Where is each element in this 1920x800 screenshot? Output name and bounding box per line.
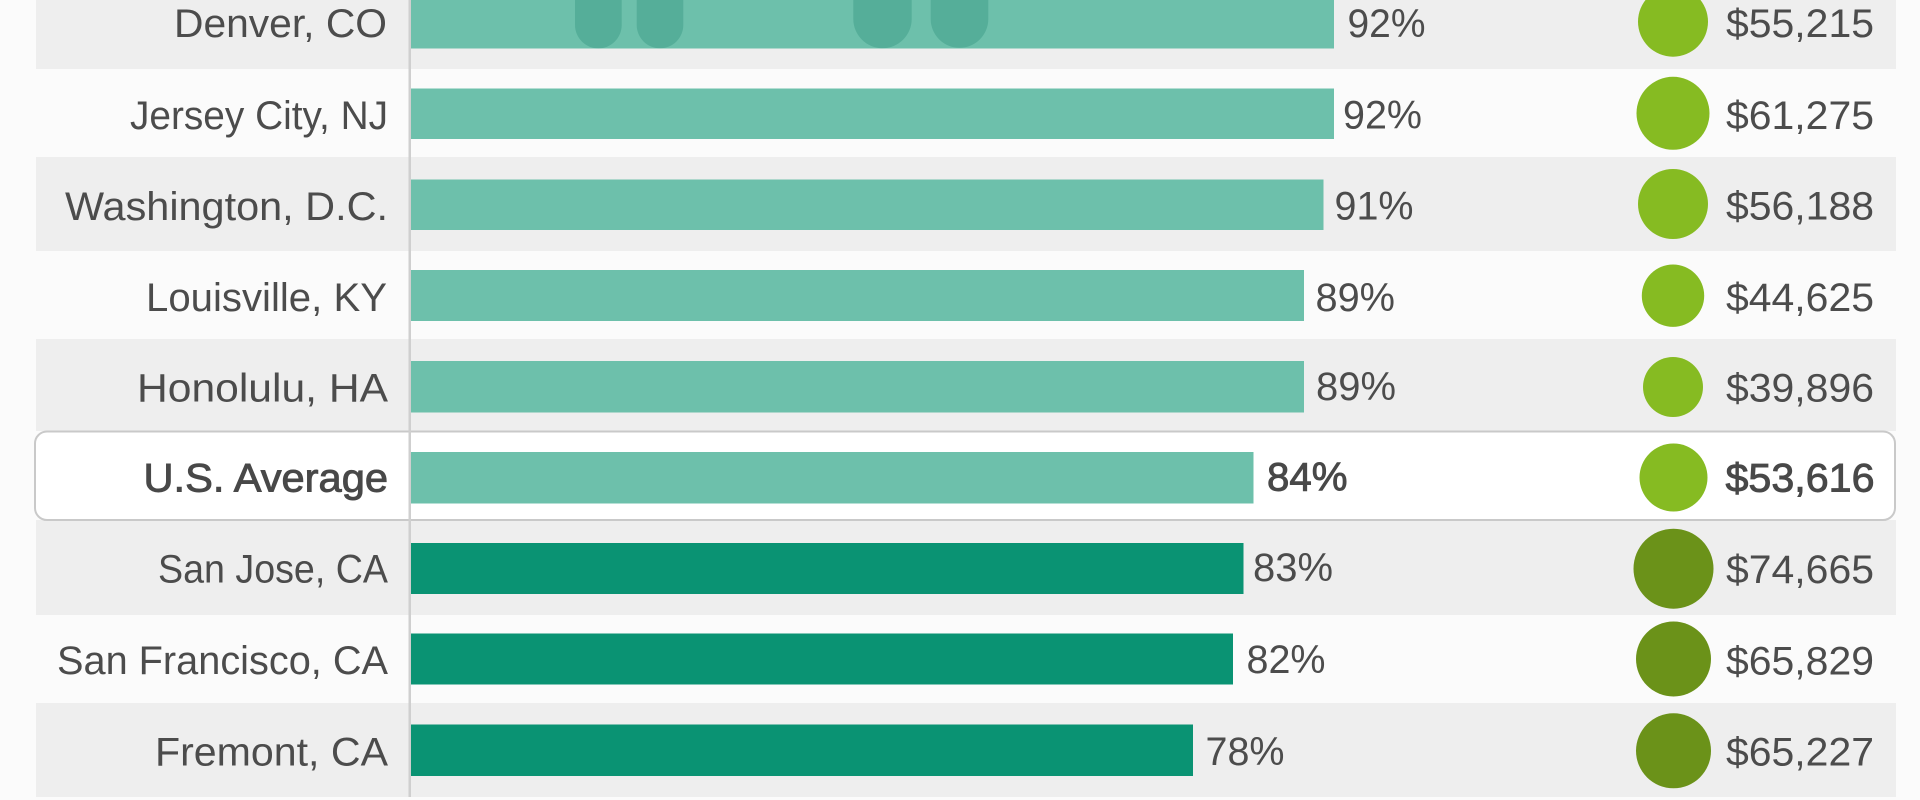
row: San Francisco, CA: 82% bbox=[1246, 638, 1326, 682]
row: Jersey City, NJ: 92% bbox=[1343, 94, 1422, 138]
row: San Jose, CA: $74,665 bbox=[1726, 548, 1874, 592]
row: Fremont, CA: Fremont, CA bbox=[155, 730, 388, 774]
highlight card: U.S. average row bbox=[35, 432, 1895, 520]
row: Louisville, KY: 89% bbox=[1316, 276, 1395, 320]
row: Jersey City, NJ bbox=[130, 77, 1874, 150]
row: Denver, CO bbox=[174, 0, 1874, 57]
row: Louisville, KY: $44,625 bbox=[1726, 276, 1874, 320]
row: Louisville, KY bbox=[146, 264, 1874, 327]
row: Honolulu, HA: 89% bbox=[1316, 365, 1396, 409]
row: Fremont, CA: $65,227 bbox=[1726, 730, 1874, 774]
row: U.S. Average: $53,616 bbox=[1726, 456, 1874, 500]
row: San Francisco, CA: San Francisco, CA bbox=[57, 639, 388, 683]
row: U.S. Average: U.S. Average bbox=[144, 456, 388, 500]
row: Washington, D.C. bbox=[65, 169, 1874, 239]
row: Denver, CO: 92% bbox=[1348, 2, 1426, 46]
row: Honolulu, HA: $39,896 bbox=[1726, 366, 1874, 410]
row: Denver, CO: $55,215 bbox=[1726, 2, 1874, 46]
row: Denver, CO: Denver, CO bbox=[174, 2, 387, 46]
row: Washington, D.C.: $56,188 bbox=[1726, 184, 1874, 228]
row: Jersey City, NJ: Jersey City, NJ bbox=[130, 94, 388, 138]
row: U.S. Average bbox=[144, 444, 1874, 512]
row: San Jose, CA bbox=[158, 529, 1874, 609]
row: Fremont, CA: 78% bbox=[1206, 730, 1284, 774]
row: Washington, D.C.: 91% bbox=[1334, 184, 1414, 228]
row: Jersey City, NJ: $61,275 bbox=[1726, 94, 1874, 138]
row: Washington, D.C.: Washington, D.C. bbox=[65, 185, 388, 229]
row: Louisville, KY: Louisville, KY bbox=[146, 276, 387, 320]
row: Honolulu, HA: Honolulu, HA bbox=[137, 366, 388, 410]
row: Honolulu, HA bbox=[137, 357, 1874, 417]
row: San Francisco, CA bbox=[57, 622, 1874, 696]
row: San Francisco, CA: $65,829 bbox=[1726, 640, 1874, 684]
row: Fremont, CA bbox=[155, 713, 1874, 788]
row: San Jose, CA: 83% bbox=[1253, 546, 1333, 590]
row: U.S. Average: 84% bbox=[1267, 456, 1348, 500]
row: San Jose, CA: San Jose, CA bbox=[158, 548, 388, 592]
